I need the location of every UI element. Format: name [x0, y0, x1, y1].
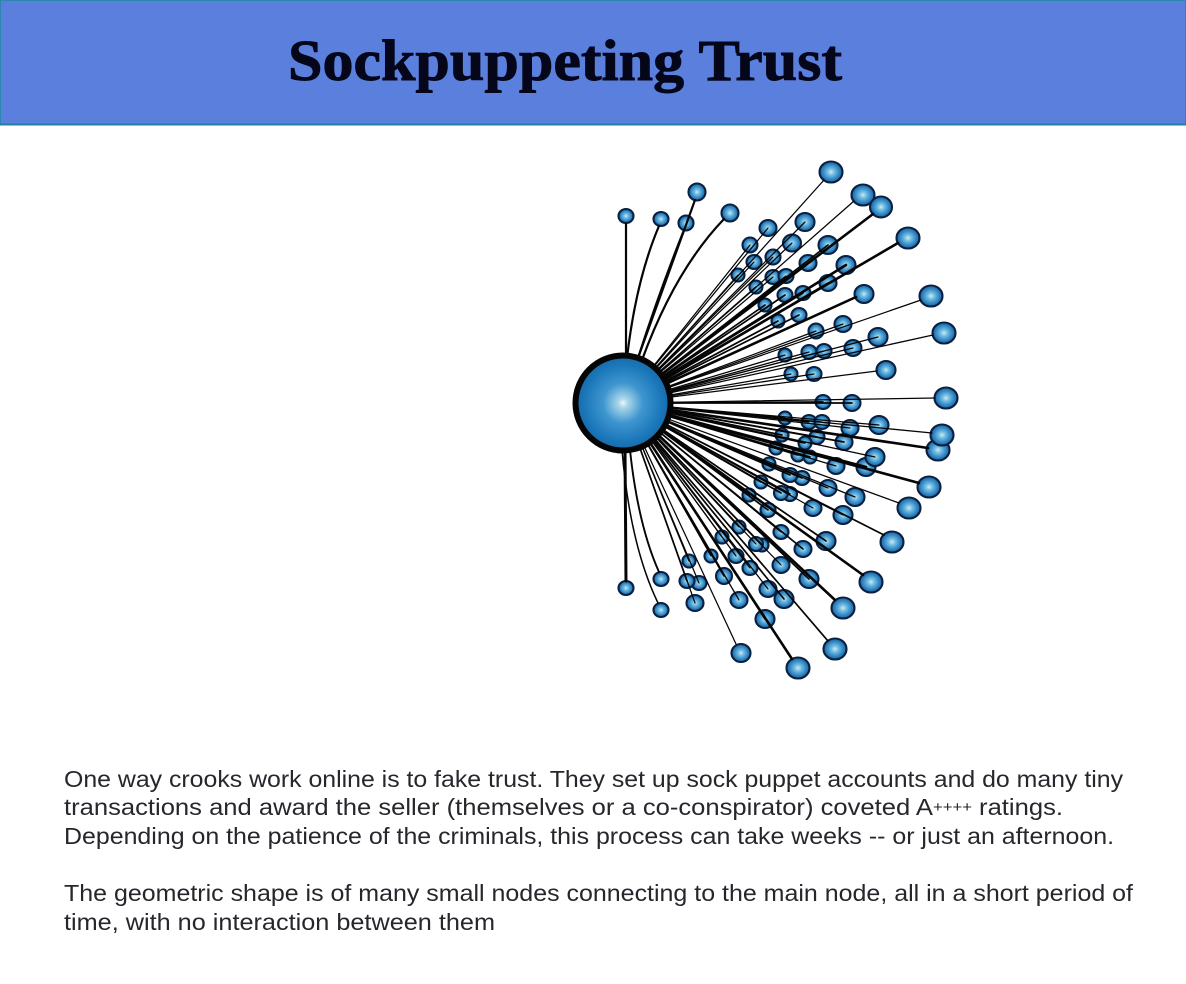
- small nodes: [618, 162, 958, 678]
- paragraph two: [64, 880, 1134, 935]
- network graph: sock puppet nodes connected to main node: [576, 162, 958, 678]
- paragraph two: The geometric shape is of many small nodes connecting to the main node, all in a short period of: [64, 880, 1134, 906]
- title: Sockpuppeting Trust: [288, 28, 843, 93]
- paragraph one: [64, 766, 1124, 849]
- paragraph one: One way crooks work online is to fake trust. They set up sock puppet accounts and do many tiny: [64, 766, 1124, 792]
- paragraph one: ratings.: [972, 794, 1063, 820]
- paragraph one: ++++: [933, 799, 972, 816]
- header banner: [0, 0, 1186, 126]
- connection lines: [622, 180, 935, 659]
- paragraph one: transactions and award the seller (themselves or a co-conspirator) coveted A: [64, 794, 845, 820]
- main node: [576, 356, 670, 450]
- paragraph two: time, with no interaction between them: [64, 909, 495, 935]
- description text: [64, 766, 1134, 935]
- paragraph one: Depending on the patience of the criminals, this process can take weeks -- or just an afternoon.: [64, 823, 1114, 849]
